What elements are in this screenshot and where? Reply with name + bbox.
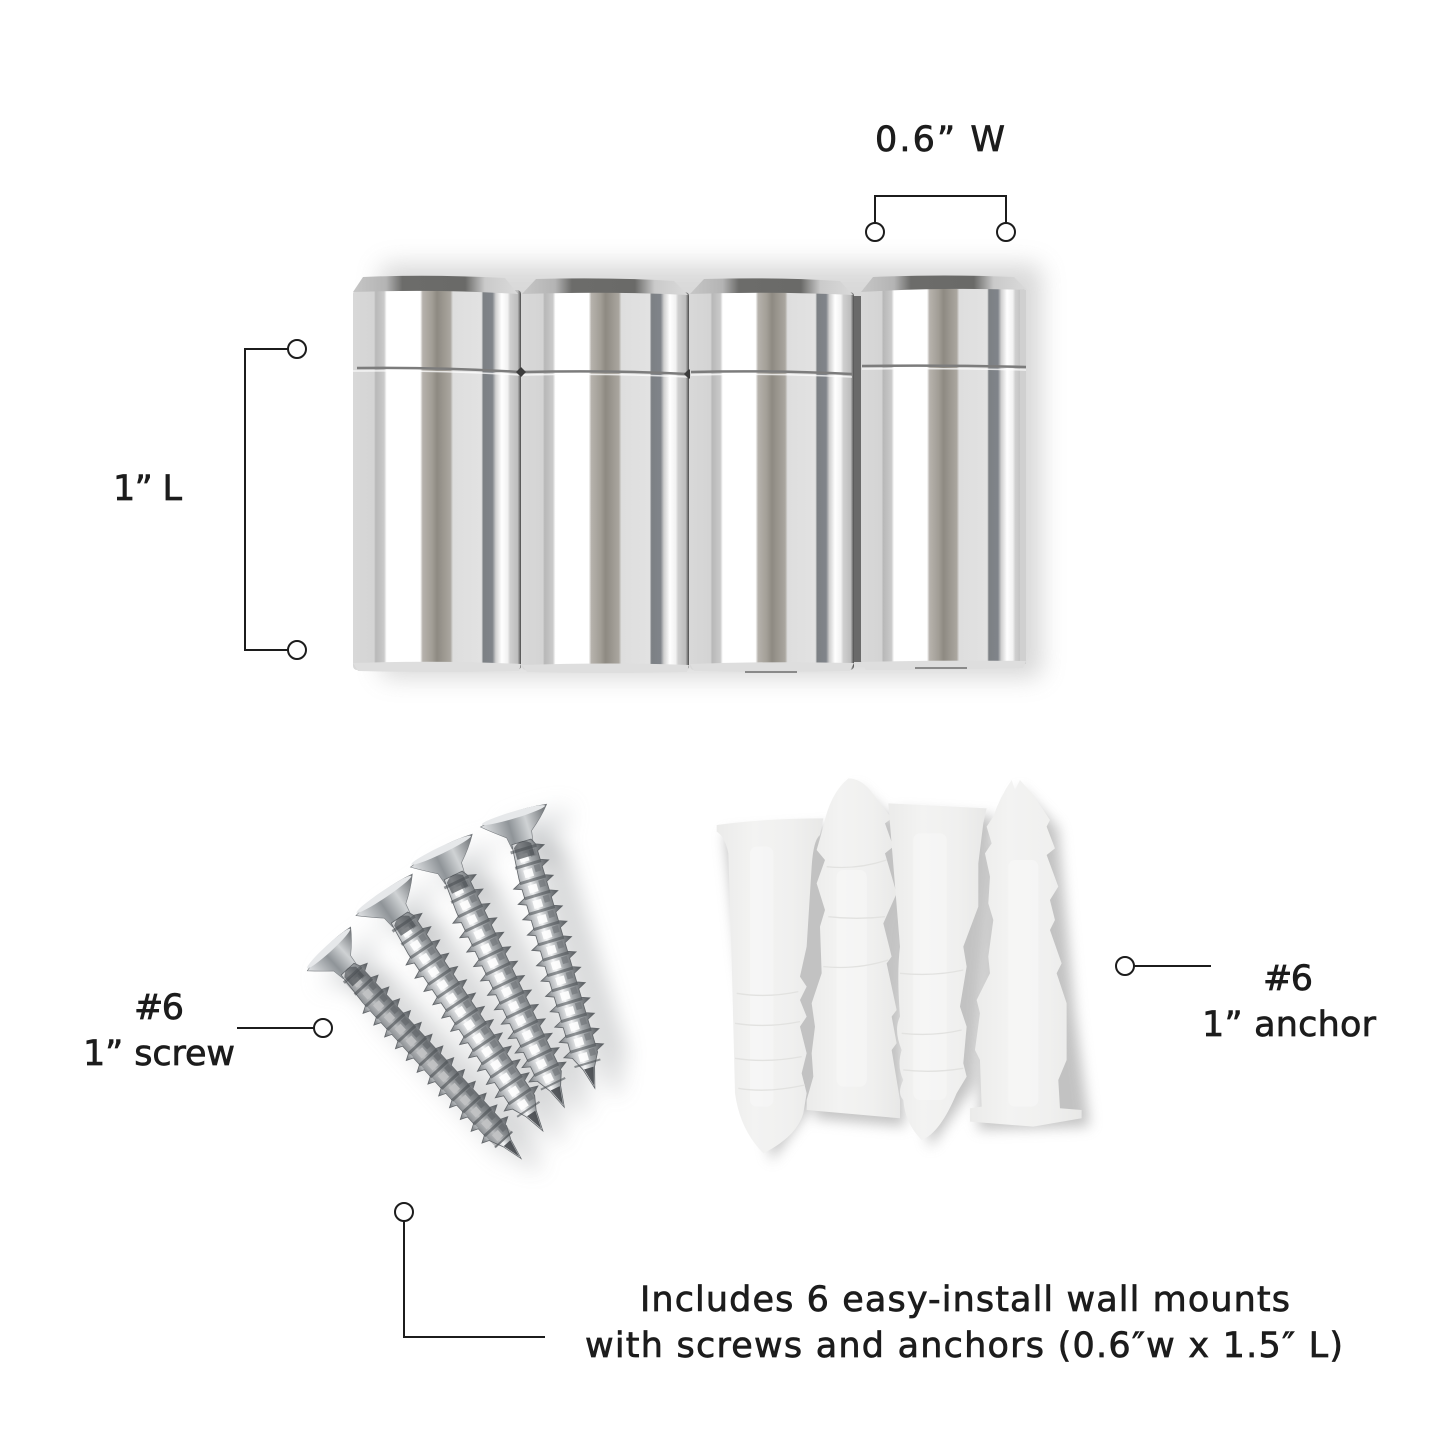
callout: anchor size: 1” anchor: [1202, 1005, 1377, 1045]
dimension label: length: 1” L: [113, 469, 182, 509]
dimension label: width: [866, 120, 1015, 241]
mount 3: [690, 278, 854, 673]
mount 1: [353, 276, 521, 672]
product image: four metal standoff mounts: [353, 264, 1042, 678]
screw 2: [353, 872, 572, 1150]
callout: included contents: Includes 6 easy-install wall mounts: [640, 1280, 1290, 1320]
anchor 1: [717, 818, 823, 1153]
mount 2: [516, 278, 694, 673]
anchor 3: [888, 803, 987, 1140]
product image: four plastic anchors: [717, 778, 1090, 1161]
callout: included contents: with screws and anchors (0.6″w x 1.5″ L): [585, 1326, 1343, 1366]
callout: included contents: [395, 1203, 1343, 1366]
mount 4: [861, 276, 1027, 670]
callout: screw size: [83, 988, 332, 1074]
dimension label: width: 0.6” W: [875, 120, 1005, 160]
screw 4: [479, 802, 628, 1098]
product image: four screws: [304, 802, 650, 1192]
callout: screw size: #6: [134, 988, 184, 1028]
screw 1: [304, 925, 544, 1179]
dimension label: length: [113, 340, 306, 659]
anchor 4: [970, 780, 1082, 1127]
callout: anchor size: #6: [1263, 959, 1313, 999]
anchor 2: [807, 778, 900, 1118]
callout: screw size: 1” screw: [83, 1034, 235, 1074]
screw 3: [408, 832, 596, 1122]
callout: anchor size: [1116, 957, 1377, 1045]
